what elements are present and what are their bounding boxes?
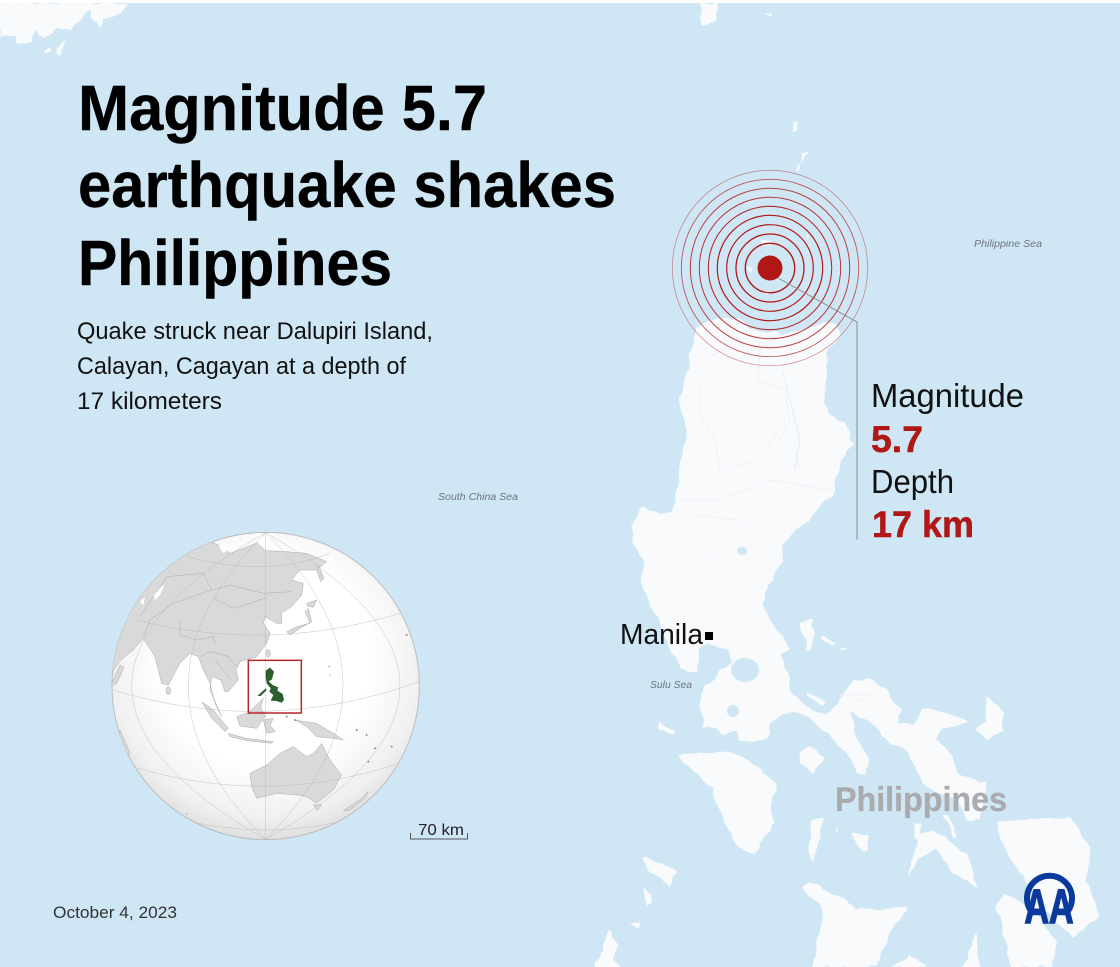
land: bottom islands [803, 882, 907, 967]
subtitle: Calayan, Cagayan at a depth of [77, 353, 406, 380]
globe: landmasses [100, 537, 368, 811]
globe: graticule [113, 533, 419, 839]
land: Mindoro [677, 752, 777, 855]
title: Magnitude 5.7 [78, 72, 487, 144]
label: Manila: Manila [620, 619, 703, 651]
globe: Tasmania [313, 805, 322, 811]
globe: inland water highlights [140, 542, 267, 605]
sea label: Sulu Sea: Sulu Sea [650, 679, 692, 691]
globe: Sumatra [202, 702, 228, 732]
globe: red locator box [248, 660, 301, 713]
subtitle [77, 318, 433, 415]
callout: magnitude and depth: 5.7 [871, 419, 923, 460]
globe: Taiwan [266, 649, 270, 657]
globe: Hokkaido and Honshu [287, 600, 317, 635]
globe: New Guinea [295, 720, 343, 740]
globe: Sakhalin [317, 565, 324, 582]
label: Philippines: Philippines [835, 781, 1007, 819]
land: Polillo [798, 620, 813, 652]
land: Panay [907, 830, 978, 887]
globe: Africa edge [110, 665, 130, 753]
title: Philippines [78, 227, 392, 299]
locator globe [100, 532, 419, 840]
globe: Java [228, 733, 273, 743]
globe: Australia [250, 743, 342, 803]
title: earthquake shakes [78, 149, 616, 221]
globe: Borneo [237, 698, 265, 728]
logo: AA [1024, 876, 1074, 934]
callout: magnitude and depth: Depth [871, 463, 954, 500]
land: Leyte and Mindanao edge [997, 893, 1057, 967]
land: top left corner [0, 3, 128, 43]
date: October 4, 2023 [53, 904, 177, 922]
leader line [778, 278, 857, 540]
globe: Pacific specks [186, 634, 408, 815]
globe: Sulawesi [263, 718, 275, 733]
land: Marinduque [800, 747, 823, 773]
globe: country borders [140, 573, 292, 678]
globe: New Zealand [343, 792, 368, 811]
subtitle: Quake struck near Dalupiri Island, [77, 318, 433, 345]
land: Luzon [631, 317, 987, 823]
subtitle: 17 kilometers [77, 388, 222, 415]
epicenter dot [758, 256, 782, 280]
callout: magnitude and depth: 17 km [872, 504, 974, 545]
title [78, 72, 616, 299]
globe: Philippines in green [257, 668, 284, 703]
globe: Sri Lanka [166, 687, 171, 695]
land: small islands [700, 3, 717, 25]
callout: magnitude and depth [871, 377, 1024, 545]
scale bar: 70 km [418, 822, 464, 839]
land: Catanduanes [977, 697, 1005, 740]
sea label: Philippine Sea: Philippine Sea [974, 238, 1042, 250]
callout: magnitude and depth: Magnitude [871, 377, 1024, 414]
logo: AA: AA [1024, 881, 1074, 934]
epicenter rings [672, 170, 868, 366]
sea label: South China Sea: South China Sea [438, 491, 518, 503]
globe: Eurasia [100, 537, 327, 717]
land: internal province lines and lakes [680, 335, 950, 760]
land: Samar [997, 818, 1100, 937]
